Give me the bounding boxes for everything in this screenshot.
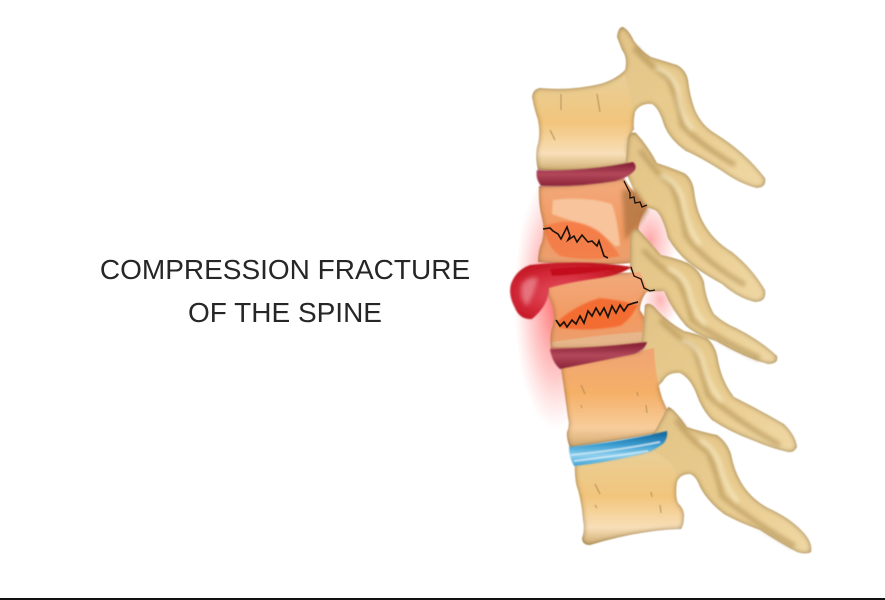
title: OF THE SPINE — [188, 297, 382, 328]
title — [100, 254, 470, 328]
vertebra unit 2 fractured — [538, 133, 765, 302]
bottom black bar — [0, 598, 885, 600]
disc 1 red — [536, 162, 636, 186]
title: COMPRESSION FRACTURE — [100, 254, 470, 285]
disc 2 red — [550, 342, 647, 369]
vertebra unit 3 fractured — [545, 229, 777, 364]
disc 3 blue — [569, 431, 667, 466]
fracture lines — [543, 181, 655, 327]
vertebra unit 5 — [575, 407, 811, 554]
vertebra unit 1 — [532, 27, 765, 188]
herniated red disc — [510, 263, 632, 319]
red inflammation glow — [514, 170, 680, 430]
vertebra unit 4 — [560, 304, 797, 452]
